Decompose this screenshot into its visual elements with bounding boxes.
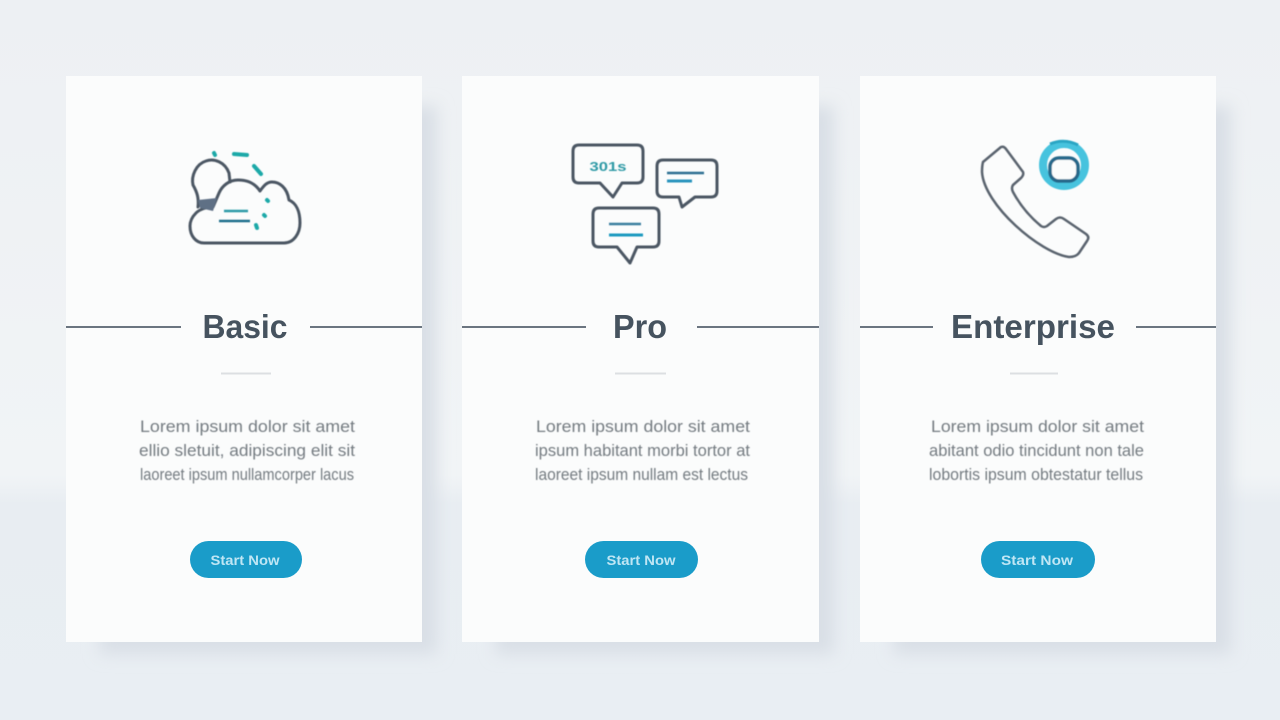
description: Pro: Lorem ipsum dolor sit amet	[536, 418, 750, 436]
icon: chat bubbles	[573, 145, 717, 263]
description: Pro	[535, 418, 750, 484]
description: Basic: ellio sletuit, adipiscing elit sit	[139, 442, 355, 460]
panel: Pro	[462, 76, 834, 654]
card: Basic	[66, 76, 422, 642]
heading: Enterprise: Enterprise	[951, 308, 1115, 345]
description: Enterprise	[929, 418, 1144, 484]
card shadow: Pro	[496, 106, 834, 654]
card: Pro	[462, 76, 819, 642]
heading: Basic: Basic	[202, 308, 288, 345]
description: Pro: laoreet ipsum nullam est lectus	[535, 466, 748, 484]
card: Enterprise	[860, 76, 1216, 642]
panel: Enterprise	[860, 76, 1231, 654]
button: Basic: Start Now	[210, 552, 280, 568]
panel: Basic	[66, 76, 437, 654]
description: Basic: Lorem ipsum dolor sit amet	[140, 418, 355, 436]
button: Enterprise	[981, 541, 1095, 578]
description: Enterprise: lobortis ipsum obtestatur tellus	[929, 466, 1143, 484]
description: Basic	[139, 418, 355, 484]
icon: phone with ring	[982, 141, 1088, 257]
description: Basic: laoreet ipsum nullamcorper lacus	[140, 466, 354, 484]
heading: Pro: Pro	[613, 308, 667, 345]
button: Basic	[190, 541, 302, 578]
card shadow: Enterprise	[894, 106, 1231, 654]
button: Pro	[585, 541, 698, 578]
button: Enterprise: Start Now	[1001, 552, 1073, 568]
icon: cloud and lightbulb	[190, 153, 300, 243]
description: Enterprise: Lorem ipsum dolor sit amet	[931, 418, 1144, 436]
description: Enterprise: abitant odio tincidunt non tale	[929, 442, 1144, 460]
card shadow: Basic	[100, 106, 437, 654]
description: Pro: ipsum habitant morbi tortor at	[535, 442, 750, 460]
button: Pro: Start Now	[606, 552, 676, 568]
icon: chat bubbles: 301s	[590, 159, 626, 174]
